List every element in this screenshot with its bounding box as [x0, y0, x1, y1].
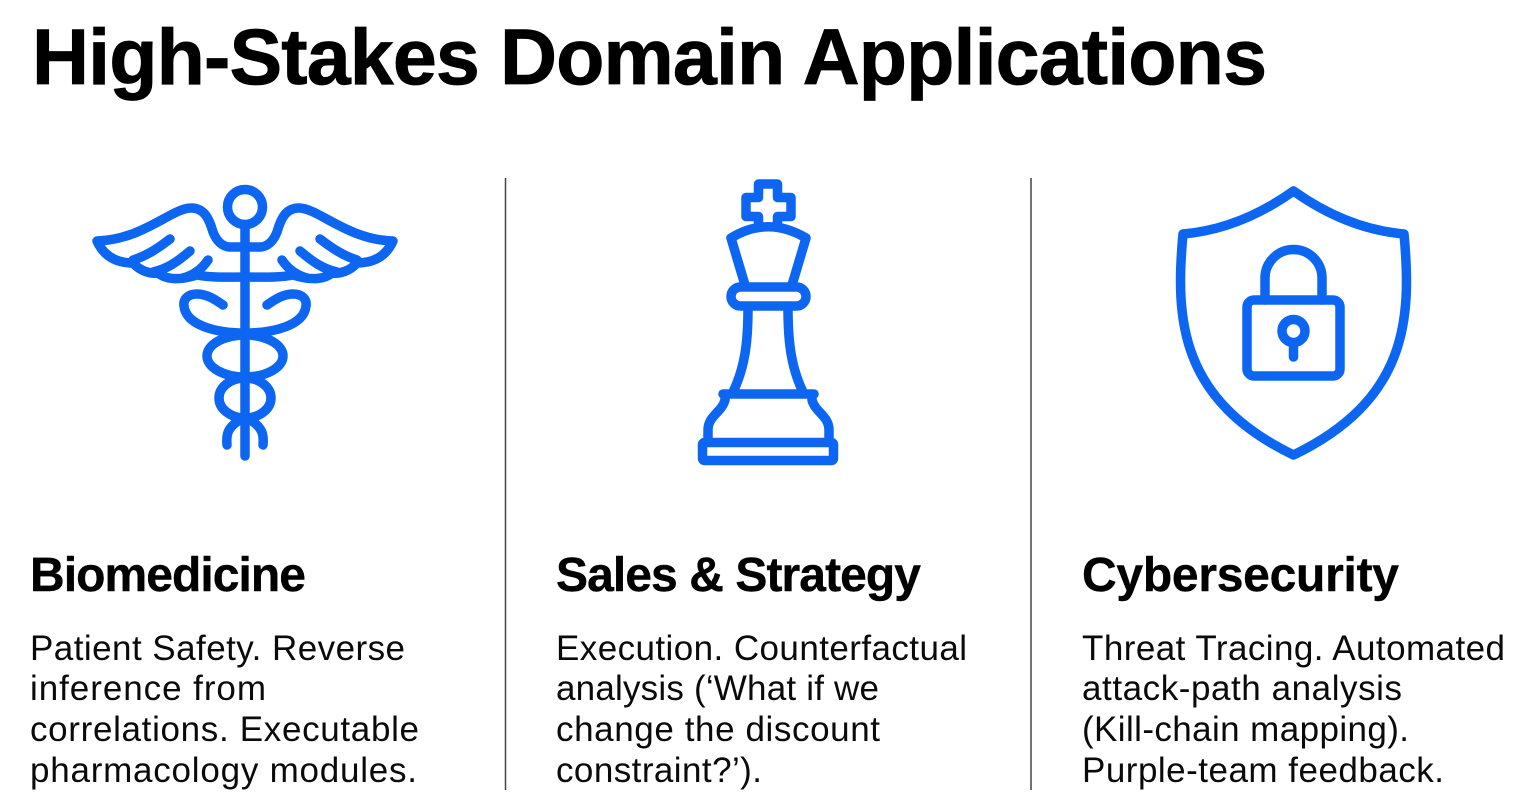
- text: cybersecurity description: Threat Tracing. Automated: [1082, 629, 1505, 668]
- panel: cybersecurity: [1082, 191, 1505, 790]
- text: cybersecurity description: (Kill-chain mapping).: [1082, 710, 1409, 749]
- text: biomedicine description: inference from: [30, 669, 266, 708]
- title: High-Stakes Domain Applications: [32, 12, 1267, 101]
- panel: biomedicine: [30, 190, 419, 790]
- icon: caduceus: [97, 190, 393, 456]
- text: cybersecurity description: Purple-team feedback.: [1082, 751, 1444, 790]
- text: sales and strategy description: change the discount: [556, 710, 880, 749]
- text: biomedicine description: [30, 629, 419, 790]
- text: sales and strategy description: Execution. Counterfactual: [556, 629, 967, 668]
- icon: shield with padlock: [1180, 191, 1407, 455]
- text: cybersecurity description: attack-path analysis: [1082, 669, 1402, 708]
- text: sales and strategy description: [556, 629, 967, 790]
- heading: sales and strategy: Sales & Strategy: [556, 549, 921, 602]
- text: biomedicine description: correlations. Executable: [30, 710, 419, 749]
- heading: biomedicine: Biomedicine: [30, 549, 306, 602]
- icon: chess king: [702, 184, 834, 460]
- panel: sales and strategy: [556, 184, 967, 790]
- text: sales and strategy description: constraint?’).: [556, 751, 762, 790]
- heading: cybersecurity: Cybersecurity: [1082, 549, 1399, 602]
- text: biomedicine description: pharmacology modules.: [30, 751, 417, 790]
- text: sales and strategy description: analysis (‘What if we: [556, 669, 879, 708]
- text: biomedicine description: Patient Safety. Reverse: [30, 629, 405, 668]
- text: cybersecurity description: [1082, 629, 1505, 790]
